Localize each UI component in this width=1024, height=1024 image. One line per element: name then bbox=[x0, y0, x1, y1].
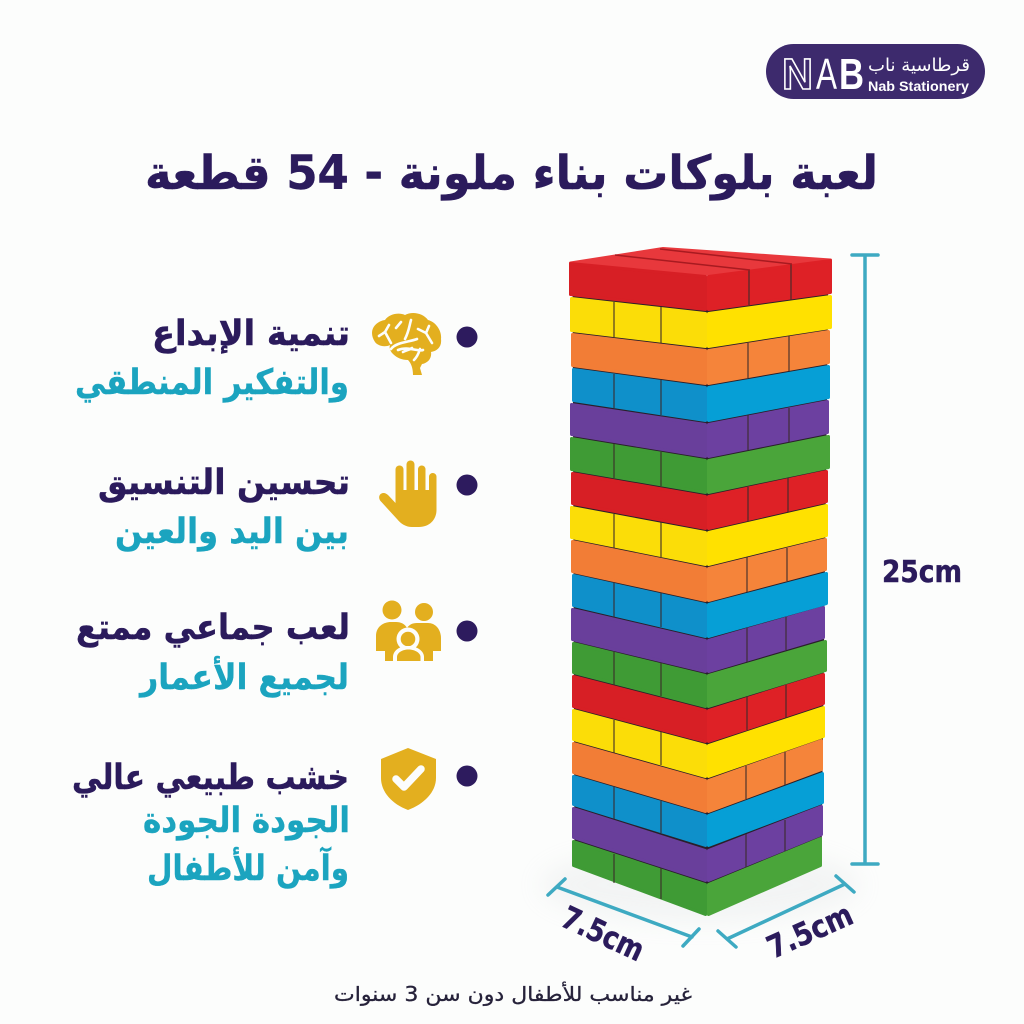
layer 2: yellow bbox=[572, 296, 830, 346]
layer 3: orange bbox=[572, 332, 828, 384]
layer 11: purple bbox=[572, 608, 824, 672]
depth dimension line left bbox=[548, 879, 699, 946]
benefit 1: creativity bbox=[75, 313, 478, 403]
benefit 3 heading: لعب جماعي ممتع bbox=[76, 608, 350, 648]
top layer: red bbox=[570, 248, 830, 310]
bullet dot bbox=[456, 620, 478, 642]
logo badge: N bbox=[782, 50, 813, 99]
icon: brain bbox=[372, 313, 441, 375]
layer 16: blue bbox=[574, 774, 822, 846]
footer warning: غير مناسب للأطفال دون سن 3 سنوات bbox=[334, 982, 692, 1006]
logo badge: قرطاسية ناب bbox=[868, 55, 970, 76]
benefit 4: natural wood bbox=[72, 748, 478, 889]
icon: shield check bbox=[381, 748, 436, 810]
benefit 2: coordination bbox=[98, 460, 478, 552]
benefit 4 subheading line 2: وآمن للأطفال bbox=[147, 846, 349, 889]
wooden block tower bbox=[570, 248, 830, 914]
depth label left: 7.5cm bbox=[556, 900, 650, 969]
layer 12: green bbox=[574, 642, 826, 706]
layer 7: red bbox=[572, 472, 826, 528]
layer 9: orange bbox=[572, 540, 826, 600]
layer 8: yellow bbox=[572, 506, 826, 564]
layer 13: red bbox=[574, 674, 824, 742]
bullet dot bbox=[456, 326, 478, 348]
title: لعبة بلوكات بناء ملونة - 54 قطعة bbox=[145, 146, 878, 201]
layer 14: yellow bbox=[574, 708, 824, 776]
layer 15: orange bbox=[574, 740, 822, 812]
layer 5: purple bbox=[572, 402, 828, 456]
logo badge bbox=[766, 44, 985, 99]
logo badge: Nab Stationery bbox=[868, 78, 969, 94]
benefit 1 heading: تنمية الإبداع bbox=[152, 314, 350, 354]
depth label right: 7.5cm bbox=[762, 897, 858, 966]
benefit 1 subheading: والتفكير المنطقي bbox=[75, 363, 349, 403]
benefit 3 subheading: لجميع الأعمار bbox=[138, 655, 349, 698]
benefit 4 heading: خشب طبيعي عالي bbox=[72, 758, 349, 798]
layer 17: purple bbox=[574, 806, 822, 880]
benefit 4 subheading line 1: الجودة الجودة bbox=[143, 801, 350, 841]
height label: 25cm bbox=[882, 555, 962, 590]
bullet dot bbox=[456, 766, 478, 786]
depth dimension line right bbox=[718, 876, 854, 947]
benefit 2 heading: تحسين التنسيق bbox=[98, 463, 350, 503]
bottom layer: green bbox=[574, 838, 820, 914]
benefit 2 subheading: بين اليد والعين bbox=[115, 512, 349, 552]
layer 4: blue bbox=[574, 366, 828, 420]
height dimension line bbox=[852, 255, 878, 864]
layer 6: green bbox=[572, 436, 828, 492]
tower shadow bbox=[540, 847, 860, 923]
benefit 3: group play bbox=[76, 600, 478, 698]
icon: family bbox=[376, 600, 441, 662]
logo badge: A bbox=[816, 50, 837, 99]
icon: hand bbox=[379, 460, 436, 527]
logo badge: B bbox=[839, 50, 864, 99]
bullet dot bbox=[456, 474, 478, 496]
layer 10: blue bbox=[574, 574, 826, 636]
